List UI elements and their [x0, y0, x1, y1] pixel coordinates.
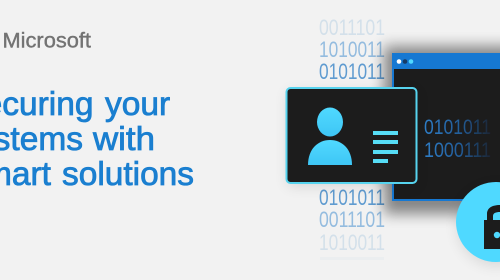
binary column bottom: 1010011 [319, 230, 385, 255]
icon: text lines [373, 131, 398, 163]
window control dots [397, 59, 413, 64]
window panel [392, 53, 500, 201]
lock badge shadow [457, 186, 500, 266]
window binary text [424, 116, 491, 162]
window shadow [384, 46, 500, 214]
icon: lock badge [456, 182, 500, 262]
binary column top: 0011101 [319, 15, 385, 40]
title [0, 86, 194, 193]
icon: person [308, 108, 352, 165]
binary column bottom: 0011101 [319, 207, 385, 232]
binary column top: 1010011 [319, 37, 385, 62]
identity card [286, 88, 416, 183]
title: your [105, 86, 170, 123]
binary column bottom: 0101011 [319, 185, 385, 210]
logo wordmark: Microsoft [2, 28, 91, 52]
title: solutions [62, 156, 194, 193]
binary column top: 0101011 [319, 59, 385, 84]
binary column bottom [319, 185, 385, 260]
binary column top [319, 15, 385, 84]
card shadow [288, 92, 416, 186]
title: with [92, 121, 155, 158]
